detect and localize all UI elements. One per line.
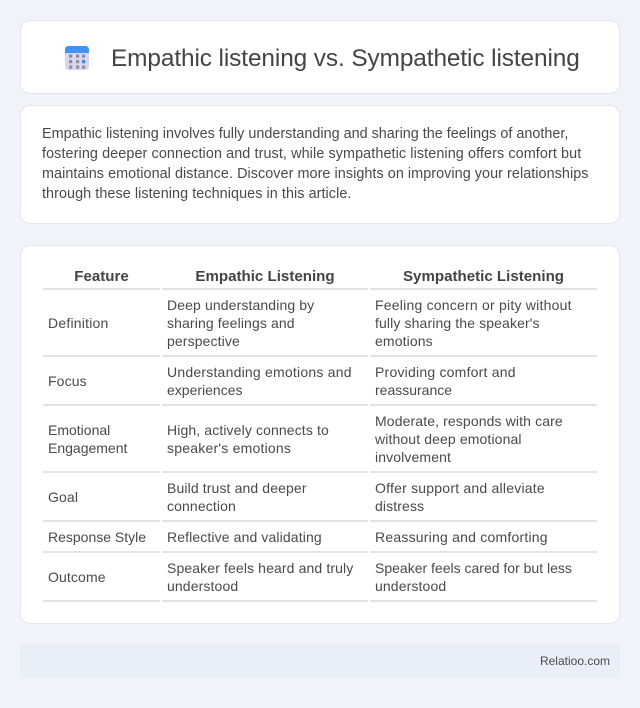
row: Definition: Feeling concern or pity without [375,297,572,313]
row: Definition: fully sharing the speaker's [375,315,540,331]
row: Response Style: Reflective and validating [167,529,322,545]
row: Emotional Engagement: speaker's emotions [167,440,291,456]
row: Outcome: Speaker feels cared for but less [375,560,572,576]
row: Outcome: understood [375,578,446,594]
intro text: Empathic listening involves fully understanding and sharing the feelings of another, [42,126,568,142]
row: Definition [43,297,597,357]
table header: Feature [74,268,129,285]
row: Emotional Engagement: Engagement [48,440,127,456]
table header: Sympathetic Listening [403,268,564,285]
row: Definition: Deep understanding by [167,297,314,313]
panel: introduction [20,105,620,224]
footer credit: Relatioo.com [540,654,610,668]
footer [20,644,620,678]
row: Goal: distress [375,498,424,514]
row: Outcome [43,560,597,602]
row: Emotional Engagement: Emotional [48,422,110,438]
row: Emotional Engagement: without deep emotional [375,431,522,447]
panel: title header [20,20,620,94]
panel: comparison table [20,245,620,624]
intro text: fostering deeper connection and trust, while sympathetic listening offers comfort but [42,146,581,162]
row: Goal: Build trust and deeper [167,480,307,496]
table header [43,268,597,290]
row: Outcome: understood [167,578,238,594]
row: Goal: Offer support and alleviate [375,480,545,496]
row: Outcome: Outcome [48,569,106,585]
intro text: maintains emotional distance. Discover more insights on improving your relationships [42,166,588,182]
title: Empathic listening vs. Sympathetic listening [111,45,580,72]
row: Focus [43,364,597,406]
row: Focus: experiences [167,382,242,398]
row: Goal [43,480,597,522]
row: Emotional Engagement: Moderate, responds with care [375,413,563,429]
row: Definition: sharing feelings and [167,315,295,331]
row: Focus: Providing comfort and [375,364,516,380]
row: Emotional Engagement: involvement [375,449,451,465]
row: Goal: Goal [48,489,78,505]
icon: calendar [65,46,89,70]
row: Goal: connection [167,498,236,514]
row: Emotional Engagement [43,413,597,473]
row: Response Style: Reassuring and comforting [375,529,548,545]
row: Outcome: Speaker feels heard and truly [167,560,353,576]
intro text [42,126,588,202]
row: Definition: perspective [167,333,240,349]
row: Focus: reassurance [375,382,452,398]
row: Response Style [43,529,597,553]
row: Focus: Understanding emotions and [167,364,352,380]
table header: Empathic Listening [195,268,335,285]
row: Focus: Focus [48,373,87,389]
row: Definition: Definition [48,315,109,331]
intro text: through these listening techniques in this article. [42,186,351,202]
row: Definition: emotions [375,333,433,349]
row: Emotional Engagement: High, actively connects to [167,422,329,438]
row: Response Style: Response Style [48,529,146,545]
